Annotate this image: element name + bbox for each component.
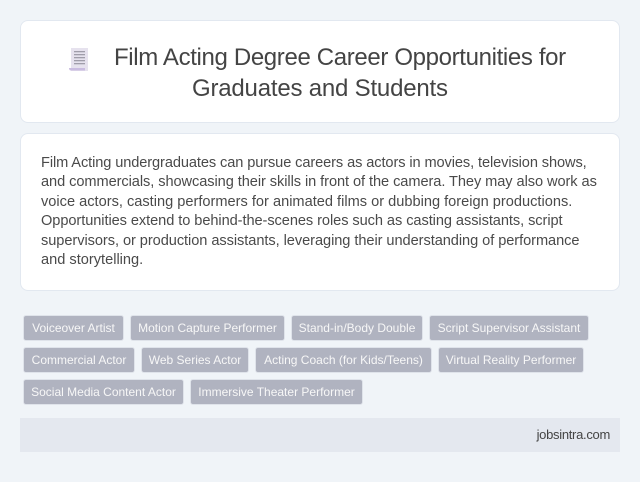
- tag: Voiceover Artist: [32, 321, 115, 335]
- tag: Social Media Content Actor: [31, 385, 176, 399]
- tag: Virtual Reality Performer: [446, 353, 576, 367]
- tag: [438, 347, 584, 373]
- description text: voice actors, casting performers for animated films or dubbing foreign productions.: [41, 194, 572, 210]
- tag: [291, 315, 423, 341]
- tag: [23, 347, 135, 373]
- tag: [190, 379, 363, 405]
- icon: paper scroll: [69, 48, 88, 71]
- description text: Opportunities extend to behind-the-scenes roles such as casting assistants, script: [41, 213, 563, 229]
- panel: title card: [20, 20, 620, 123]
- tag list: [23, 315, 589, 405]
- title: Film Acting Degree Career Opportunities for: [114, 44, 566, 71]
- tag: Web Series Actor: [149, 353, 241, 367]
- tag: [23, 379, 184, 405]
- footer source text: jobsintra.com: [537, 427, 610, 442]
- description text: Film Acting undergraduates can pursue careers as actors in movies, television shows,: [41, 155, 587, 171]
- description text: and storytelling.: [41, 252, 143, 268]
- footer bar: [20, 418, 620, 452]
- tag: [255, 347, 432, 373]
- title: [114, 44, 566, 102]
- tag: Script Supervisor Assistant: [438, 321, 580, 335]
- tag: Immersive Theater Performer: [198, 385, 355, 399]
- title: Graduates and Students: [192, 75, 448, 102]
- description text: supervisors, or production assistants, leveraging their understanding of performance: [41, 233, 579, 249]
- tag: Motion Capture Performer: [138, 321, 277, 335]
- tag: Commercial Actor: [32, 353, 126, 367]
- tag: Acting Coach (for Kids/Teens): [264, 353, 423, 367]
- tag: [429, 315, 589, 341]
- tag: [130, 315, 285, 341]
- tag: [23, 315, 124, 341]
- tag: [141, 347, 249, 373]
- panel: description card: [20, 133, 620, 291]
- description text: and commercials, showcasing their skills in front of the camera. They may also work as: [41, 174, 597, 190]
- tag: Stand-in/Body Double: [299, 321, 415, 335]
- description text: [41, 155, 597, 268]
